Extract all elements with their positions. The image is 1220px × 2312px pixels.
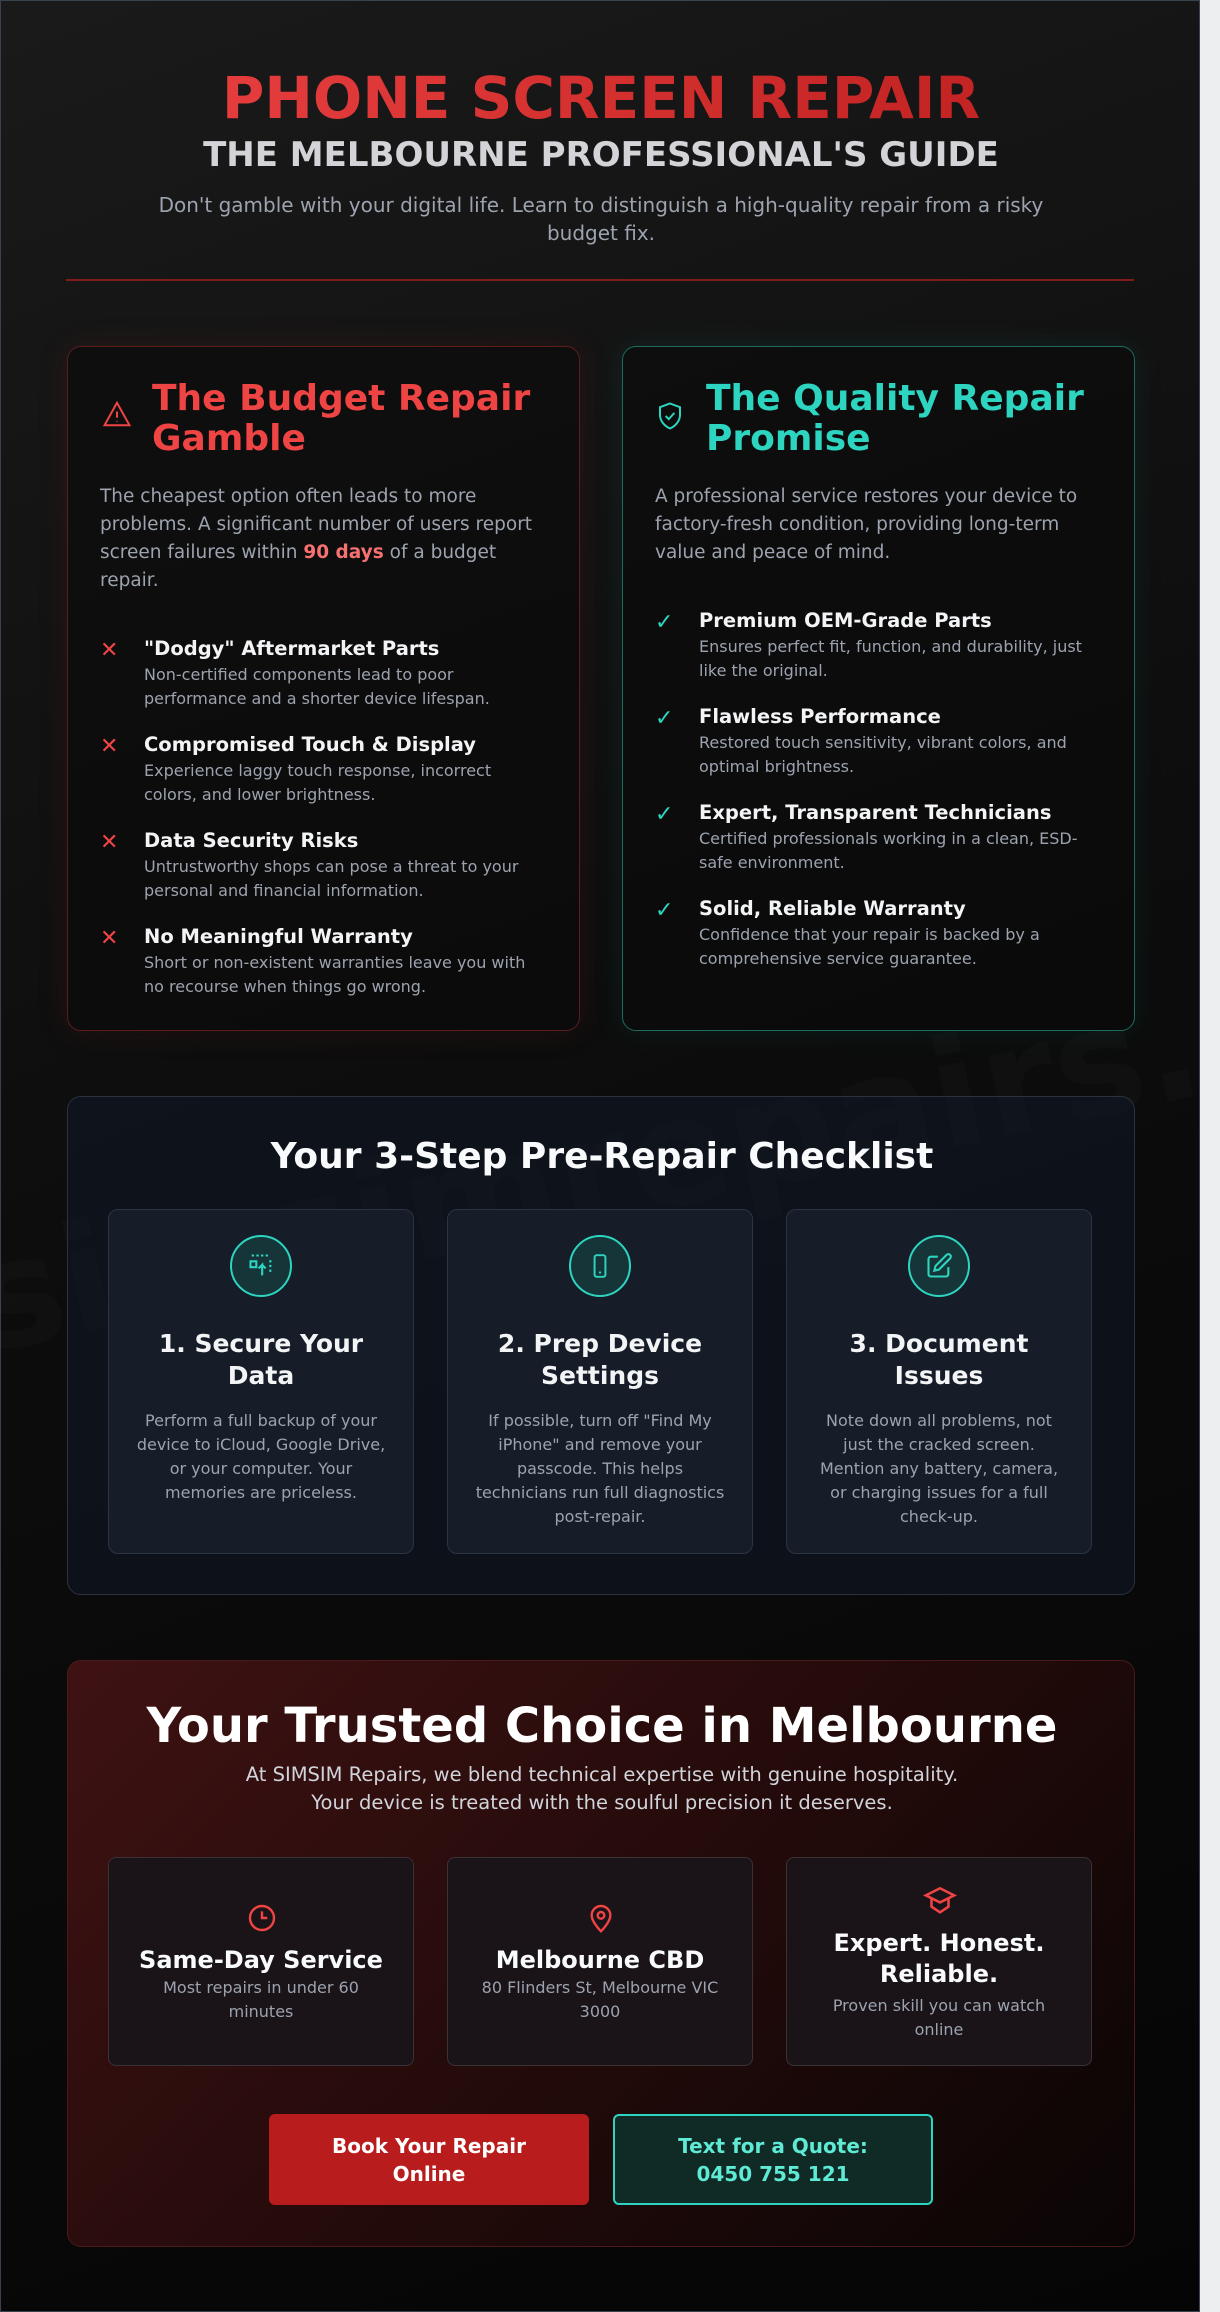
- feature: same-day: Same-Day Service: [139, 1946, 383, 1974]
- subtext: Your device is treated with the soulful precision it deserves.: [311, 1791, 893, 1814]
- step text: Note down all problems, not just the cracked screen. Mention any battery, camera, or charging issues for a full check-up.: [820, 1411, 1058, 1526]
- icon: phone: [569, 1235, 631, 1297]
- panel: quality repair promise: ✓: [655, 802, 673, 827]
- intro text: Don't gamble with your digital life. Learn to distinguish a high-quality repair from a risky budget fix.: [159, 193, 1043, 245]
- list: benefits: [655, 609, 1082, 968]
- panel: checklist: [67, 1096, 1135, 1595]
- paragraph: The cheapest option often leads to more problems. A significant number of users report screen failures within 90 days of a budget repair.: [100, 486, 532, 591]
- step title: 2. Prep Device Settings: [498, 1329, 702, 1390]
- step title: 3. Document Issues: [850, 1329, 1028, 1390]
- item: Confidence that your repair is backed by a comprehensive service guarantee.: [699, 925, 1040, 968]
- icon: backup: [230, 1235, 292, 1297]
- item: [100, 925, 525, 996]
- feature: location: 80 Flinders St, Melbourne VIC 3000: [482, 1978, 718, 2021]
- item: Flawless Performance: [699, 705, 941, 728]
- panel: quality repair promise: [622, 346, 1135, 1031]
- panel: budget repair gamble: ✕: [100, 638, 118, 663]
- icon: clock: [248, 1904, 276, 1932]
- step title: 1. Secure Your Data: [159, 1329, 363, 1390]
- button: book online: Book Your Repair: [332, 2134, 526, 2158]
- item: [100, 637, 490, 708]
- item: Solid, Reliable Warranty: [699, 897, 966, 920]
- panel: budget repair gamble: [67, 346, 580, 1031]
- item: [655, 609, 1082, 680]
- panel: budget repair gamble: ✕: [100, 830, 118, 855]
- heading: Your 3-Step Pre-Repair Checklist: [271, 1136, 933, 1177]
- panel: quality repair promise: ✓: [655, 898, 673, 923]
- step 2: [447, 1209, 753, 1554]
- heading: The Budget Repair Gamble: [152, 378, 530, 459]
- feature: expert: [786, 1857, 1092, 2066]
- subtext: [246, 1763, 958, 1814]
- item: [100, 829, 518, 900]
- feature: location: [447, 1857, 753, 2066]
- icon: warning triangle: [102, 400, 132, 426]
- panel: trusted choice: [67, 1660, 1135, 2247]
- title: [1, 63, 1201, 133]
- feature: expert: Proven skill you can watch online: [833, 1996, 1045, 2039]
- item: [655, 897, 1040, 968]
- item: Short or non-existent warranties leave you with no recourse when things go wrong.: [144, 953, 525, 996]
- button: book online: [269, 2114, 589, 2205]
- step 1: [108, 1209, 414, 1554]
- item: [100, 733, 491, 804]
- item: Premium OEM-Grade Parts: [699, 609, 992, 632]
- subtitle: THE MELBOURNE PROFESSIONAL'S GUIDE: [203, 135, 999, 175]
- button: text for quote: 0450 755 121: [696, 2162, 850, 2186]
- heading: The Quality Repair Promise: [706, 378, 1084, 459]
- icon: cap: [923, 1886, 957, 1914]
- panel: budget repair gamble: ✕: [100, 926, 118, 951]
- item: Untrustworthy shops can pose a threat to your personal and financial information.: [144, 857, 518, 900]
- item: Ensures perfect fit, function, and durability, just like the original.: [699, 637, 1082, 680]
- item: Expert, Transparent Technicians: [699, 801, 1051, 824]
- button: text for quote: Text for a Quote:: [678, 2134, 868, 2158]
- button: text for quote: [613, 2114, 933, 2205]
- feature: location: Melbourne CBD: [496, 1946, 704, 1974]
- step text: Perform a full backup of your device to iCloud, Google Drive, or your computer. Your memories are priceless.: [137, 1411, 385, 1502]
- feature: expert: Expert. Honest.: [834, 1929, 1044, 1957]
- panel: quality repair promise: ✓: [655, 706, 673, 731]
- panel: quality repair promise: ✓: [655, 610, 673, 635]
- paragraph: A professional service restores your device to factory-fresh condition, providing long-term value and peace of mind.: [655, 486, 1077, 563]
- item: Compromised Touch & Display: [144, 733, 476, 756]
- icon: edit: [908, 1235, 970, 1297]
- item: Data Security Risks: [144, 829, 358, 852]
- button: book online: Online: [393, 2162, 465, 2186]
- item: [655, 801, 1078, 872]
- item: Certified professionals working in a clean, ESD-safe environment.: [699, 829, 1078, 872]
- item: Non-certified components lead to poor performance and a shorter device lifespan.: [144, 665, 490, 708]
- feature: same-day: Most repairs in under 60 minutes: [163, 1978, 359, 2021]
- feature: expert: Reliable.: [880, 1960, 998, 1988]
- item: "Dodgy" Aftermarket Parts: [144, 637, 439, 660]
- item: Experience laggy touch response, incorrect colors, and lower brightness.: [144, 761, 491, 804]
- panel: budget repair gamble: ✕: [100, 734, 118, 759]
- step text: If possible, turn off "Find My iPhone" and remove your passcode. This helps technicians run full diagnostics post-repair.: [476, 1411, 724, 1526]
- heading: Your Trusted Choice in Melbourne: [147, 1698, 1057, 1754]
- subtext: At SIMSIM Repairs, we blend technical expertise with genuine hospitality.: [246, 1763, 958, 1786]
- item: Restored touch sensitivity, vibrant colors, and optimal brightness.: [699, 733, 1067, 776]
- list: risks: [100, 637, 525, 996]
- icon: pin: [590, 1904, 612, 1933]
- item: No Meaningful Warranty: [144, 925, 413, 948]
- icon: shield: [659, 402, 681, 430]
- feature: same-day: [108, 1857, 414, 2066]
- step 3: [786, 1209, 1092, 1554]
- title: PHONE SCREEN REPAIR: [222, 64, 980, 132]
- item: [655, 705, 1067, 776]
